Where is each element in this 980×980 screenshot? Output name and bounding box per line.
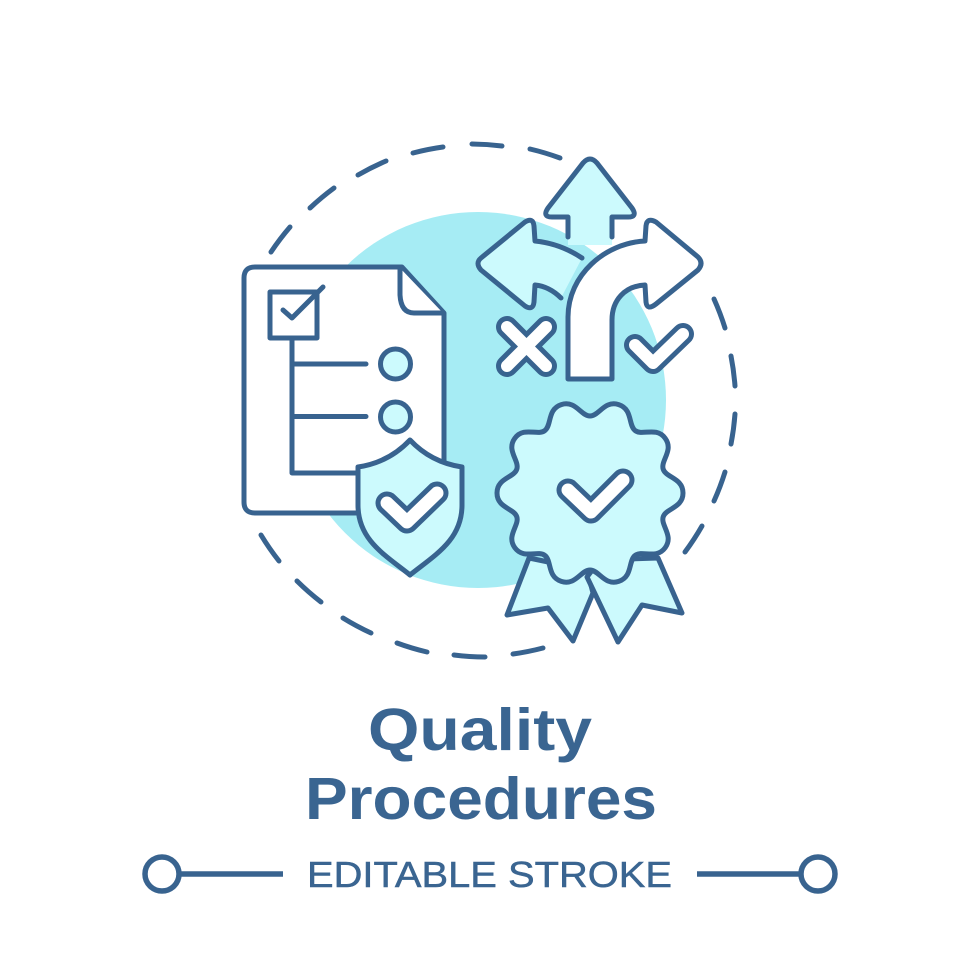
background circle: [290, 212, 666, 588]
icon: award badge: [497, 404, 683, 642]
icon: checklist document: [244, 267, 444, 513]
dashed ring: [261, 144, 735, 657]
left connector: [145, 857, 283, 891]
right connector: [697, 857, 835, 891]
title: [305, 697, 657, 832]
icon: check mark: [635, 334, 683, 363]
icon: shield with check: [358, 440, 462, 575]
title: Quality: [368, 697, 592, 763]
subtitle: editable stroke: EDITABLE STROKE: [307, 854, 672, 895]
icon: left arrow: [478, 220, 582, 308]
title: Procedures: [305, 766, 657, 832]
icon: cross mark: [507, 327, 546, 366]
icon: right curved arrow: [568, 220, 701, 379]
icon: up arrow: [546, 159, 634, 245]
